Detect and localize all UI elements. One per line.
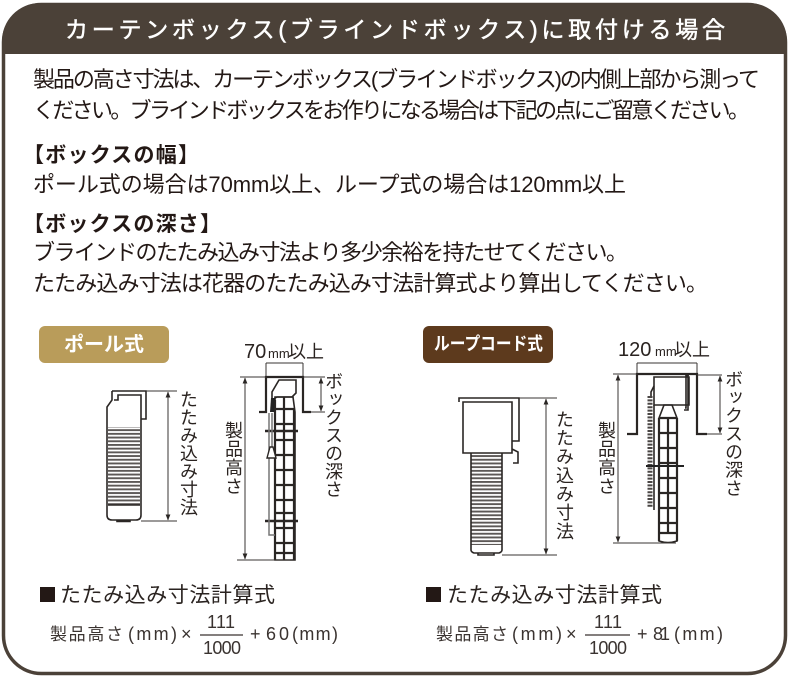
intro text: 製品の高さ寸法は、カーテンボックス(ブラインドボックス)の内側上部から測って: [33, 67, 760, 92]
label: loop cord type: ループコード式: [434, 334, 543, 354]
formula: loop type: たたみ込み寸法計算式: [447, 584, 662, 607]
dimension: 70mm width: [244, 341, 324, 377]
intro text: ください。ブラインドボックスをお作りになる場合は下記の点にご留意ください。: [33, 98, 750, 123]
diagram: pole type box and blind: [259, 377, 311, 560]
formula: pole type: (mm): [128, 624, 177, 644]
label: loop cord type: [423, 326, 553, 363]
dimension: 120mm width: mm: [655, 344, 677, 359]
formula: loop type: 81: [653, 624, 670, 644]
heading: box depth: 【ボックスの深さ】: [23, 213, 221, 236]
formula: pole type: ×: [181, 624, 192, 644]
dimension: loop folded height: [502, 398, 574, 555]
formula: pole type: [40, 584, 338, 658]
label: pole type: [39, 326, 169, 363]
dimension: loop box depth: [697, 370, 743, 497]
formula: pole type: 1000: [203, 638, 241, 658]
formula: loop type: +: [637, 624, 648, 644]
dimension: 70mm width: 70: [244, 341, 266, 363]
dimension: loop product height: [596, 374, 676, 543]
formula: pole type: たたみ込み寸法計算式: [60, 584, 275, 607]
dimension: loop box depth: ボックスの深さ: [723, 370, 743, 497]
formula: loop type: (mm): [512, 624, 562, 644]
diagram: pole type collapsed blind: [107, 391, 146, 522]
box depth text: たたみ込み寸法は花器のたたみ込み寸法計算式より算出してください。: [33, 271, 708, 296]
dimension: pole box depth: [303, 372, 343, 498]
formula: pole type: 60: [266, 624, 289, 644]
formula: loop type: (mm): [674, 624, 723, 644]
intro text: [33, 67, 760, 123]
dimension: loop product height: 製品高さ: [596, 421, 616, 495]
dimension: 120mm width: [618, 339, 710, 374]
dimension: 70mm width: 以上: [288, 342, 324, 362]
dimension: loop folded height: たたみ込み寸法: [554, 410, 574, 540]
formula: pole type: (mm): [292, 624, 338, 644]
formula: pole type: 111: [207, 612, 235, 632]
title: カーテンボックス(ブラインドボックス)に取付ける場合: [65, 16, 725, 42]
box depth text: [33, 240, 708, 296]
formula: loop type: 製品高さ: [436, 625, 508, 644]
heading: box width: 【ボックスの幅】: [23, 144, 199, 167]
dimension: pole folded height: [141, 390, 198, 521]
box width text: ポール式の場合は70mm以上、ループ式の場合は120mm以上: [33, 172, 626, 197]
header band: [2, 3, 787, 54]
dimension: 120mm width: 以上: [674, 340, 710, 360]
formula: loop type: 111: [594, 612, 622, 632]
dimension: pole product height: 製品高さ: [223, 421, 243, 495]
formula: pole type: +: [250, 624, 261, 644]
formula: loop type: [426, 584, 723, 658]
label: pole type: ポール式: [64, 333, 144, 356]
dimension: pole folded height: たたみ込み寸法: [178, 390, 198, 516]
dimension: pole product height: [223, 377, 290, 560]
formula: loop type: 1000: [589, 638, 627, 658]
dimension: 70mm width: mm: [268, 346, 290, 361]
diagram: loop type box and blind: [627, 374, 707, 542]
formula: loop type: ×: [566, 624, 577, 644]
dimension: 120mm width: 120: [618, 339, 651, 361]
formula: pole type: 製品高さ: [50, 625, 123, 644]
dimension: pole box depth: ボックスの深さ: [323, 372, 343, 498]
diagram: loop type collapsed blind: [459, 398, 519, 555]
box depth text: ブラインドのたたみ込み寸法より多少余裕を持たせてください。: [33, 240, 628, 265]
